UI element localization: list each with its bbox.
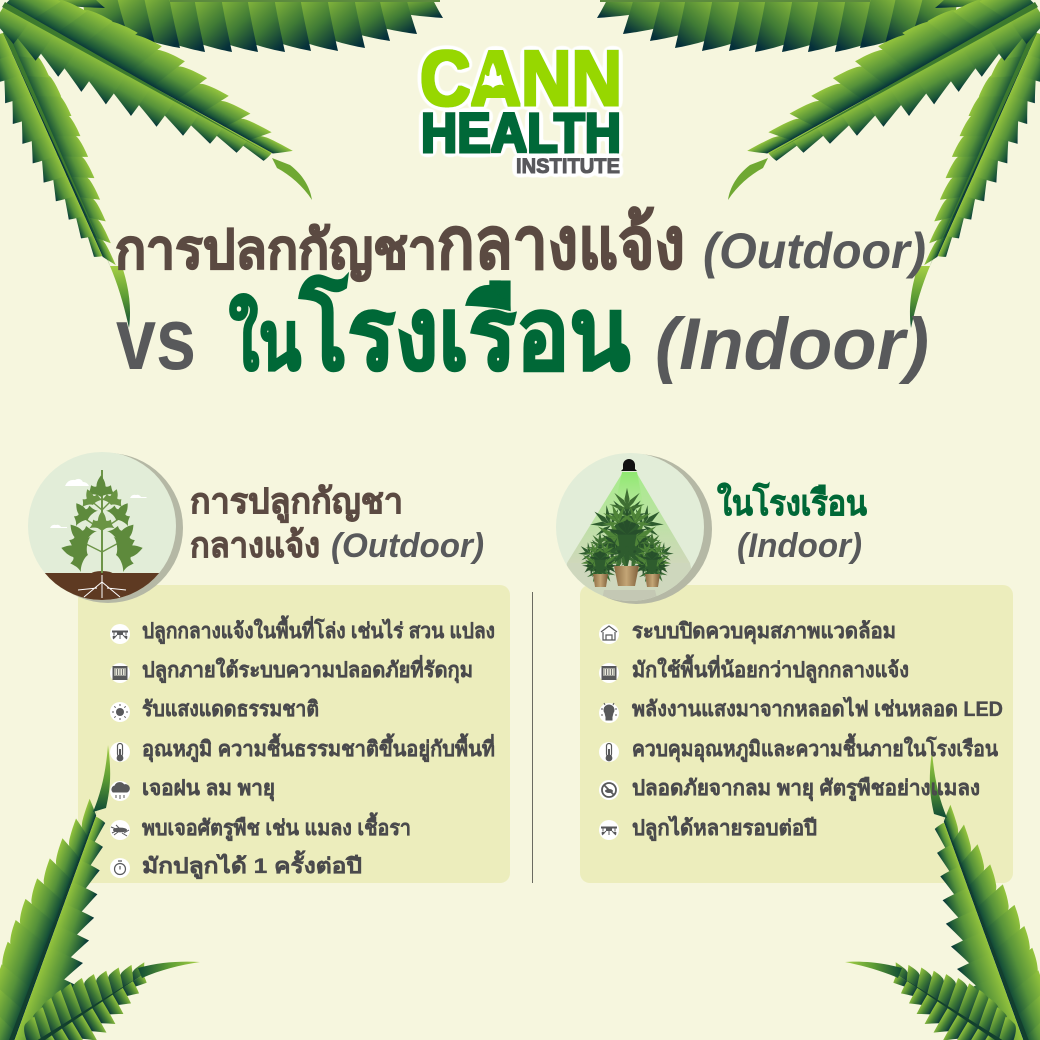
item 3: รับแสงแดดธรรมชาติ bbox=[142, 698, 319, 721]
item 7: มักปลูกได้ 1 ครั้งต่อปี bbox=[142, 850, 362, 880]
logo text: INSTITUTE: INSTITUTE bbox=[516, 155, 620, 178]
title line 2: โรงเรือน bbox=[299, 275, 630, 391]
heading: outdoor bbox=[190, 482, 484, 565]
item 1: ระบบปิดควบคุมสภาพแวดล้อม bbox=[632, 619, 896, 645]
item 2: มักใช้พื้นที่น้อยกว่าปลูกกลางแจ้ง bbox=[632, 654, 909, 684]
icon: logo cannabis leaf bbox=[481, 63, 505, 88]
title line 1: การปลกกัญชา bbox=[115, 220, 437, 281]
icon: top-left cannabis leaves bbox=[0, 0, 443, 328]
title line 2: ใน bbox=[229, 294, 301, 387]
icon: top-right cannabis leaves bbox=[597, 0, 1040, 328]
heading: indoor: ในโรงเรือน bbox=[717, 482, 867, 523]
item 4: อุณหภูมิ ความชื้นธรรมชาติขึ้นอยู่กับพื้นที่ bbox=[142, 733, 495, 763]
panel: indoor list background bbox=[580, 585, 1013, 883]
item 7 bbox=[110, 850, 362, 880]
illustration: indoor plants under lamp in circle bbox=[556, 453, 712, 610]
title line 1: กลางแจ้ง bbox=[437, 204, 685, 284]
item 4: ควบคุมอุณหภูมิและความชื้นภายในโรงเรือน bbox=[632, 733, 999, 763]
icon: bottom-right small leaf bbox=[845, 944, 1028, 1040]
logo: Cann Health Institute bbox=[420, 34, 622, 178]
heading: indoor: (Indoor) bbox=[737, 527, 862, 565]
item 4 bbox=[110, 733, 495, 763]
illustration: outdoor plant in circle bbox=[28, 452, 183, 603]
item 6: ปลูกได้หลายรอบต่อปี bbox=[632, 815, 817, 842]
list: outdoor items bbox=[110, 615, 495, 880]
logo text: CANN: CANN bbox=[420, 34, 622, 122]
title line 2: vs bbox=[116, 289, 196, 388]
list: indoor items bbox=[599, 619, 1003, 842]
item 2 bbox=[599, 654, 909, 684]
heading: outdoor: กลางแจ้ง bbox=[190, 526, 320, 565]
item 1: ปลูกกลางแจ้งในพื้นที่โล่ง เช่นไร่ สวน แปลง bbox=[142, 615, 495, 645]
item 5: เจอฝน ลม พายุ bbox=[142, 777, 275, 802]
title line 1 bbox=[115, 204, 926, 284]
panel: outdoor list background bbox=[78, 585, 510, 883]
title line 2: (Indoor) bbox=[655, 304, 929, 385]
title line 1: (Outdoor) bbox=[703, 223, 926, 279]
heading: outdoor: การปลูกกัญชา bbox=[190, 482, 403, 523]
item 6: พบเจอศัตรูพืช เช่น แมลง เชื้อรา bbox=[142, 812, 411, 842]
icon: bottom-left large leaf bbox=[0, 745, 138, 1040]
item 5: ปลอดภัยจากลม พายุ ศัตรูพืชอย่างแมลง bbox=[632, 776, 980, 802]
item 2 bbox=[110, 654, 473, 684]
title line 2 bbox=[116, 275, 929, 391]
item 6 bbox=[110, 812, 411, 842]
icon: bottom-left small leaf bbox=[12, 944, 200, 1040]
item 2: ปลูกภายใต้ระบบความปลอดภัยที่รัดกุม bbox=[142, 654, 473, 684]
heading: outdoor: (Outdoor) bbox=[331, 527, 484, 565]
logo text: HEALTH: HEALTH bbox=[421, 101, 621, 164]
item 1 bbox=[110, 615, 495, 645]
heading: indoor bbox=[717, 482, 867, 565]
icon: bottom-right large leaf bbox=[902, 751, 1040, 1040]
item 4 bbox=[599, 733, 999, 763]
item 3: พลังงานแสงมาจากหลอดไฟ เช่นหลอด LED bbox=[632, 696, 1003, 721]
